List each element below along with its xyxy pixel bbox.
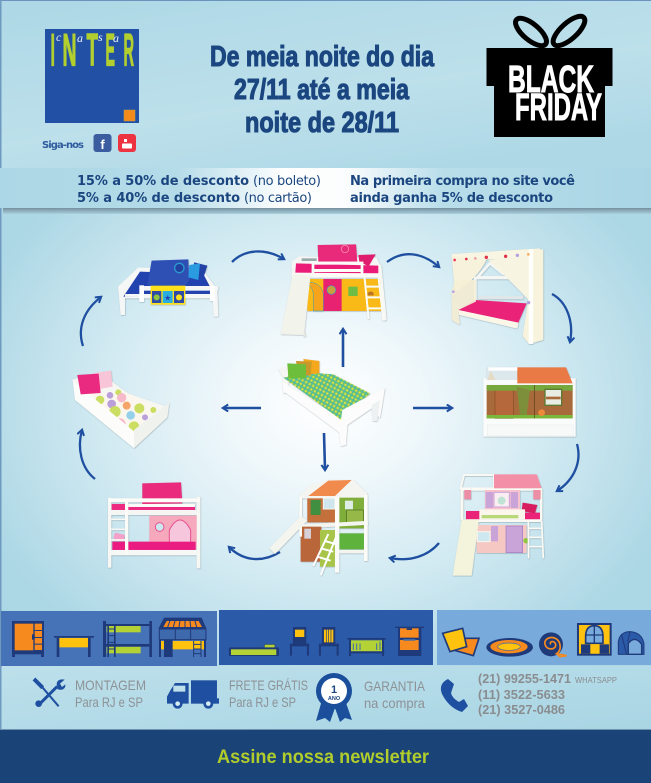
discount strip (0, 168, 651, 214)
title (210, 41, 435, 139)
social follow: Siga-nos (42, 140, 84, 151)
arrows: from center bed (223, 329, 452, 470)
text: phone numbers: WHATSAPP (575, 676, 617, 685)
icon: low bed (229, 644, 279, 656)
text: phone numbers: (11) 3522-5633 (478, 688, 565, 702)
text: warranty: GARANTIA (364, 678, 426, 694)
text: phone numbers (478, 672, 617, 717)
title: De meia noite do dia (210, 41, 435, 73)
bed: pink and yellow loft with slide (281, 244, 387, 337)
discount text (77, 174, 321, 206)
panel: textile and decor icons (437, 610, 651, 665)
text: phone numbers: (21) 3527-0486 (478, 703, 565, 717)
text: free shipping (229, 677, 308, 710)
icon: delivery truck (167, 680, 219, 709)
icon: loft with roof (158, 618, 207, 657)
icon: bench (347, 638, 386, 656)
panel: beds chairs desks icons (219, 610, 433, 665)
title: noite de 28/11 (245, 107, 399, 139)
arrows: bed cycle (80, 251, 578, 559)
icon: black friday gift box: FRIDAY (515, 87, 602, 129)
icon: dresser (395, 627, 424, 656)
icon: one year warranty ribbon (316, 673, 352, 722)
newsletter text: Assine nossa newsletter (217, 747, 430, 768)
text: R (124, 24, 134, 76)
bed: white bed with patterned mattress (72, 371, 169, 448)
logo: Casa Inter: a (77, 31, 83, 45)
discount text: (no cartão) (244, 191, 312, 206)
bed: blue bed with pockets (118, 259, 218, 317)
icon: facebook: f (100, 137, 105, 152)
text: free shipping: Para RJ e SP (229, 694, 296, 710)
text: phone numbers: (21) 99255-1471 (478, 672, 571, 686)
icon: black friday gift box: BLACK (508, 59, 594, 101)
icon: one year warranty ribbon: ANO (328, 696, 341, 702)
text: warranty (364, 678, 426, 711)
logo: Casa Inter: a (113, 31, 119, 45)
icon: youtube (118, 134, 136, 152)
bed: pink doll house loft (453, 474, 543, 576)
bed: house loft with slide and jeep theme (269, 480, 368, 575)
logo: Casa Inter: c (56, 30, 62, 44)
first purchase text (350, 174, 575, 206)
logo: Casa Inter: T (86, 24, 98, 76)
icon: wardrobe (12, 621, 44, 657)
icon: round rug (486, 638, 533, 657)
logo: Casa Inter: N (62, 24, 76, 76)
bed: center plain bed (278, 359, 385, 446)
icon: cushions (443, 628, 479, 656)
bed: treehouse panel bed (483, 367, 576, 437)
icon: chair yellow (290, 627, 309, 656)
icon: chair striped (319, 627, 339, 656)
text: assembly: Para RJ e SP (75, 694, 143, 710)
icon: black friday gift box (486, 12, 612, 137)
logo: Casa Inter: E (106, 24, 115, 76)
bed: blue bed with pockets: ★ (164, 293, 171, 302)
bed: pink bunk bed (108, 482, 200, 568)
icon: bunk bed (103, 621, 152, 657)
first purchase text: Na primeira compra no site você (350, 174, 575, 189)
icon: window with shutters (577, 623, 612, 656)
title: 27/11 até a meia (234, 74, 410, 106)
social follow (42, 134, 136, 152)
logo: Casa Inter: I (50, 24, 55, 76)
panel: services footer (2, 666, 651, 730)
icon: tools (34, 678, 65, 707)
text: free shipping: FRETE GRÁTIS (229, 677, 308, 693)
icon: one year warranty ribbon: 1 (331, 684, 337, 696)
discount text: (no boleto) (253, 174, 321, 189)
first purchase text: ainda ganha 5% de desconto (350, 191, 553, 206)
text: assembly: MONTAGEM (75, 677, 146, 693)
icon: telephone (441, 679, 468, 712)
panel: beds and bunks icons (1, 611, 217, 666)
logo: Casa Inter: s (98, 30, 103, 44)
icon: play tunnel (618, 632, 644, 654)
logo: Casa Inter (45, 24, 139, 123)
text: warranty: na compra (364, 695, 425, 711)
discount text: 5% a 40% de desconto (77, 191, 240, 206)
bed: canopy bed with curtains (452, 248, 543, 344)
icon: rolled rug (539, 632, 567, 657)
discount text: 15% a 50% de desconto (77, 174, 249, 189)
icon: desk (54, 636, 94, 657)
newsletter bar (0, 729, 651, 783)
text: assembly (75, 677, 146, 710)
